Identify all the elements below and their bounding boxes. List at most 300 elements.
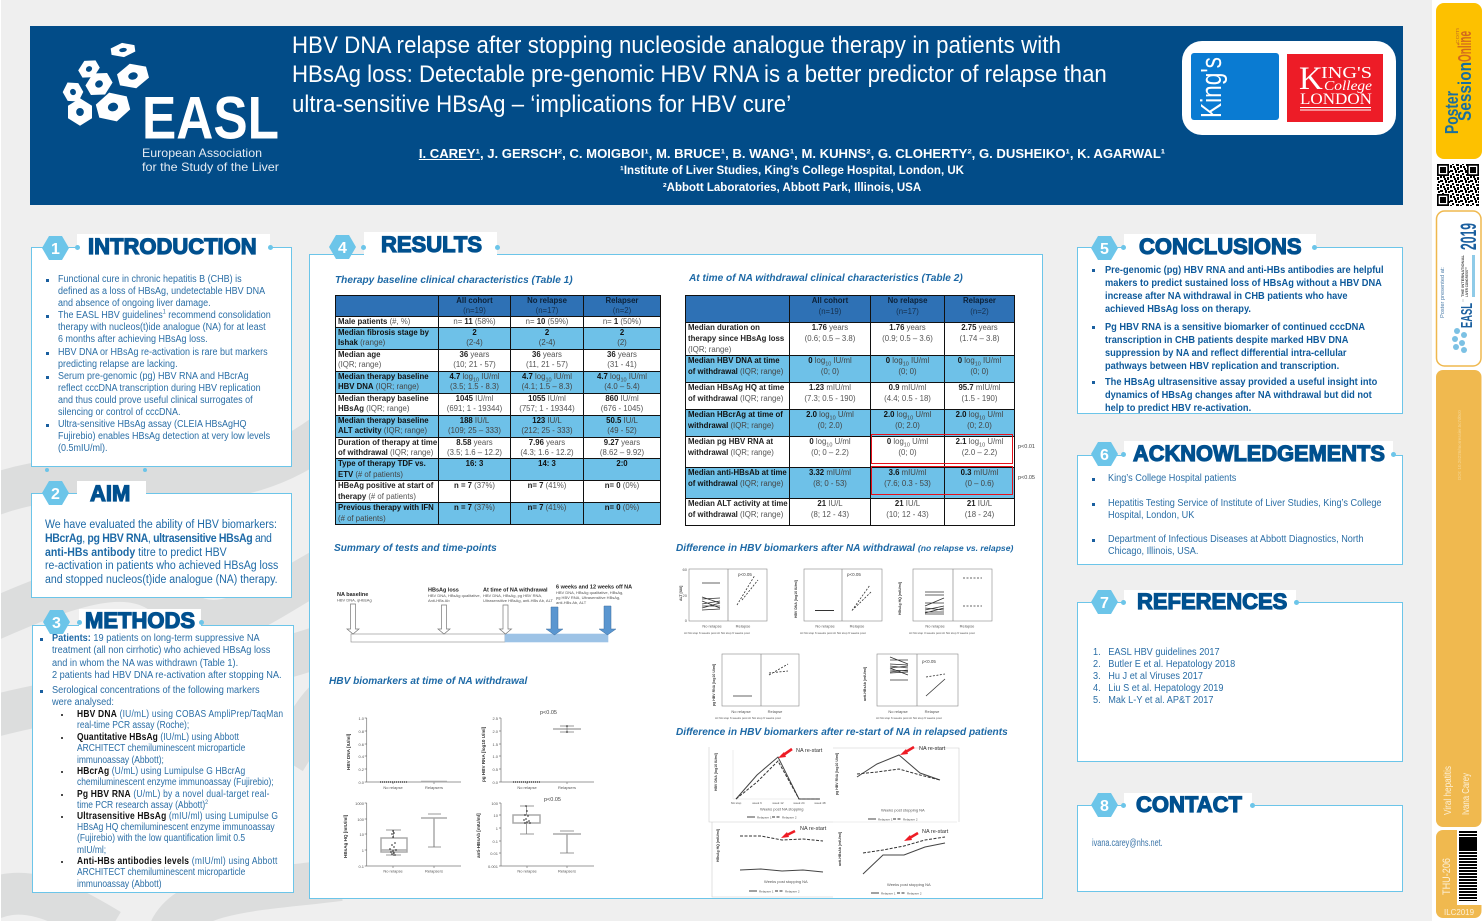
heading: references: REFERENCES — [1137, 589, 1287, 614]
chart: anti-HBs after restart: anti-HBsAb [mIU/ml] — [838, 832, 842, 866]
chart: anti-HBsAb box plot: 0.01 — [490, 851, 499, 856]
table 2: at withdrawal characteristics: Median HBsAg HQ at time — [688, 383, 784, 392]
chart: HBV DNA after withdrawal: Relapse — [850, 624, 865, 628]
table 2: at withdrawal characteristics: Median HBV DNA at time — [688, 356, 780, 365]
chart: pg HBV RNA box plot — [481, 710, 594, 790]
chart: HBsAg after withdrawal: No relapse — [925, 624, 945, 628]
table 2: at withdrawal characteristics: (0.9; 0.5 – 3.6) — [882, 334, 933, 343]
chart: HBsAg HQ box plot: 10 — [360, 832, 365, 837]
badge: topic and author: DOI: 10.26226/morressier.5c7d0c0 — [1457, 410, 1462, 480]
table 2: at withdrawal characteristics: 0 log10 IU/ml — [808, 356, 852, 368]
text: aim statement: re-activation in patients who achieved HBsAg loss — [45, 560, 278, 572]
logo: King's College Hospital and King's College London: K — [1299, 61, 1323, 97]
text: reference list — [1093, 647, 1235, 706]
icon: section number 7 — [1091, 590, 1118, 614]
timeline of tests: HBV DNA, qHBsAg — [337, 598, 372, 602]
table 1: therapy baseline characteristics: (n=17) — [536, 306, 558, 315]
chart: HBV DNA after restart — [709, 747, 833, 822]
chart: pg HBV RNA box plot: 1.5 — [492, 742, 499, 747]
text: acknowledgements bullets: King’s College Hospital patients — [1108, 473, 1236, 484]
text: patients and serological markers: Patients: 19 patients on long-term suppressive NA — [52, 633, 260, 644]
chart: ALT after withdrawal: ALT [IU/l] — [679, 586, 683, 601]
text: introduction bullets: reflect cccDNA transcription during HBV replication — [58, 382, 261, 394]
chart: HBV DNA after withdrawal: p<0.05 — [847, 572, 861, 577]
table 1: therapy baseline characteristics: 36 years — [460, 350, 489, 359]
text: introduction bullets: and absence of ongoing liver damage. — [58, 298, 211, 308]
table 2: at withdrawal characteristics: 0 log10 U/ml — [887, 437, 928, 449]
chart: anti-HBs after withdrawal: No relapse — [888, 709, 908, 714]
text: reference list: 3. Hu J et al Viruses 2017 — [1093, 671, 1203, 682]
table 1: therapy baseline characteristics: 14: 3 — [538, 459, 556, 468]
text: conclusions bullets: increase after NA withdrawal in CHB patients who have — [1105, 290, 1348, 302]
chart: anti-HBs after withdrawal: At NA stop 6 weeks post At NA stop 6 weeks post — [876, 716, 942, 720]
logo: EASL: for the Study of the Liver — [142, 160, 279, 174]
table 1: therapy baseline characteristics: All cohort — [456, 296, 493, 305]
chart: pg HBV RNA box plot: 1.0 — [492, 754, 499, 759]
table 2: at withdrawal characteristics: (0; 0) — [821, 367, 839, 376]
table 1: therapy baseline characteristics: HBV DNA (IQR; range) — [338, 382, 419, 391]
text: introduction bullets: Ultra-sensitive HBsAg assay (CLEIA HBsAgHQ — [58, 418, 247, 430]
chart: HBV DNA box plot: 0.2 — [358, 767, 365, 772]
table 2: at withdrawal characteristics: therapy since HBsAg loss — [688, 334, 784, 343]
table 2: at withdrawal characteristics: 3.32 mIU/ml — [809, 468, 851, 477]
icon: section number 6: 6 — [1100, 447, 1109, 464]
text: acknowledgements bullets — [1092, 473, 1382, 557]
text: conclusions bullets: achieved HBsAg loss on therapy. — [1105, 303, 1251, 315]
table 1: therapy baseline characteristics: 16: 3 — [466, 459, 483, 468]
table 1: therapy baseline characteristics: n= 1 (50%) — [603, 317, 641, 326]
badge: presented at EASL ILC 2019 — [1436, 211, 1481, 366]
table 1: therapy baseline characteristics: 9.27 years — [604, 438, 640, 447]
table 2: at withdrawal characteristics: Median HBcrAg at time of — [688, 410, 783, 419]
table 2: at withdrawal characteristics: 2.0 log10 U/ml — [956, 410, 1003, 422]
text: introduction bullets: 6 months after achieving HBsAg loss. — [58, 334, 208, 344]
badge: poster session online — [1436, 3, 1482, 159]
table 1: therapy baseline characteristics: (4.1; 1.5 – 8.3) — [522, 382, 572, 391]
table 1: therapy baseline characteristics: 123 IU/L — [532, 416, 562, 425]
table 1: therapy baseline characteristics: (109; 25 – 333) — [448, 426, 501, 435]
chart: anti-HBs after restart: Weeks post stopping NA — [887, 882, 931, 887]
panel: contact — [1077, 792, 1403, 892]
table 1: therapy baseline characteristics: (10; 21 - 57) — [453, 360, 496, 369]
table 1: therapy baseline characteristics: 36 years — [607, 350, 637, 359]
table 1: therapy baseline characteristics: Median therapy baseline — [338, 372, 429, 381]
badge: presented at EASL ILC 2019: LIVER CONGRESS™ — [1465, 267, 1469, 297]
table 1: therapy baseline characteristics: No relapse — [527, 296, 567, 305]
chart: HBV DNA after restart: week 12 — [772, 801, 784, 805]
chart: HBV DNA after restart: NA stop — [731, 801, 742, 805]
chart: HBsAg HQ box plot: 1000 — [355, 801, 365, 806]
table 1: therapy baseline characteristics: (757; 1 - 19344) — [519, 404, 575, 413]
table 1: therapy baseline characteristics: (n=19) — [463, 306, 486, 315]
text: aim statement — [45, 519, 278, 586]
table 2: at withdrawal characteristics — [685, 295, 1015, 526]
text: patients and serological markers: Serological concentrations of the following markers — [52, 685, 260, 696]
text: patients and serological markers: chemiluminescent enzyme immunoassay (Fujirebio); — [77, 777, 274, 788]
sidebar — [1432, 0, 1484, 921]
table 2: at withdrawal characteristics: (7.3; 0.5 - 190) — [804, 394, 856, 403]
table 2: at withdrawal characteristics: of withdrawal (IQR; range) — [688, 394, 783, 403]
table 1: therapy baseline characteristics: Median therapy baseline — [338, 416, 429, 425]
chart: anti-HBs after withdrawal: anti-HBsAb [mIU/ml] — [863, 667, 867, 701]
chart: pg HBV RNA box plot: No relapse — [517, 785, 537, 790]
table 2: at withdrawal characteristics: (0; 2.0) — [967, 421, 992, 430]
logo: King's College Hospital and King's College London: LONDON — [1300, 91, 1372, 108]
table 1: therapy baseline characteristics: n= 0 (0%) — [605, 481, 639, 490]
table 2: at withdrawal characteristics: (18 - 24) — [965, 510, 994, 519]
text: acknowledgements bullets: Department of Infectious Diseases at Abbott Diagnostics, North — [1108, 534, 1364, 545]
table 2: at withdrawal characteristics: (0; 0) — [970, 367, 989, 376]
text: introduction bullets: Fujirebio) enables HBsAg detection at very low levels — [58, 430, 270, 442]
text: patients and serological markers: real-time PCR assay (Roche); — [77, 720, 189, 731]
chart: ALT after withdrawal: 0 — [685, 618, 688, 623]
chart: pg RNA after withdrawal — [712, 654, 799, 720]
icon: section number 4 — [329, 235, 356, 259]
timeline of tests — [337, 584, 632, 642]
table 1: therapy baseline characteristics: HBsAg (IQR; range) — [338, 404, 410, 413]
chart: HBV DNA box plot: 0.8 — [358, 729, 365, 734]
table 2: at withdrawal characteristics: (0; 2.0) — [818, 421, 842, 430]
table 2: at withdrawal characteristics: (8; 12 - 43) — [811, 510, 849, 519]
text: reference list: 4. Liu S et al. Hepatology 2019 — [1093, 683, 1224, 694]
text: conclusions bullets: dynamics of HBsAg changes after NA withdrawal but did not — [1105, 389, 1372, 401]
table 1: therapy baseline characteristics: Median fibrosis stage by — [338, 328, 429, 337]
table 1: therapy baseline characteristics: 2:0 — [616, 459, 628, 468]
logo: King's College Hospital and King's College London: King's — [1196, 57, 1228, 118]
table 1: therapy baseline characteristics: 860 IU/ml — [605, 394, 639, 403]
icon: section number 1 — [42, 236, 69, 260]
chart: pg HBV RNA box plot: 0.0 — [492, 780, 499, 785]
badge: poster session online: Poster — [1442, 91, 1462, 134]
icon: section number 8 — [1091, 793, 1118, 817]
chart: pg HBV RNA box plot: 2.5 — [492, 716, 499, 721]
icon: section number 8: 8 — [1100, 798, 1109, 815]
table 2: at withdrawal characteristics: 1.76 years — [889, 323, 926, 332]
panel: references — [1077, 589, 1403, 762]
text: patients and serological markers: time PCR research assay (Abbott)2 — [77, 800, 208, 811]
badge: topic and author — [1436, 370, 1482, 827]
chart: HBV DNA after restart: HBV DNA [log10 IU/ml] — [714, 753, 718, 791]
table 1: therapy baseline characteristics: of withdrawal (IQR; range) — [338, 448, 433, 457]
badge: poster code and barcode: THU-206 — [1441, 858, 1453, 895]
heading: contact: CONTACT — [1136, 792, 1242, 817]
chart: HBV DNA box plot: HBV DNA [IU/ml] — [346, 733, 351, 770]
text: conclusions bullets: Pre-genomic (pg) HBV RNA and anti-HBs antibodies are helpful — [1105, 264, 1384, 276]
timeline of tests: Anti-HBs Ab — [428, 598, 450, 603]
badge: poster session online: .com — [1455, 27, 1461, 46]
chart: ALT after withdrawal: p<0.05 — [738, 572, 752, 577]
table 2: at withdrawal characteristics: 2.0 log10 U/ml — [884, 410, 931, 422]
chart: anti-HBs after restart: Relapser 1 — [881, 892, 896, 896]
table 2: at withdrawal characteristics: (8; 0 - 53) — [813, 479, 847, 488]
chart: HBsAg HQ box plot: Relapsers — [425, 868, 443, 874]
table 2: at withdrawal characteristics: Median pg HBV RNA at — [688, 437, 773, 446]
chart: pg HBV RNA box plot: 2.0 — [492, 729, 499, 734]
heading: results: RESULTS — [381, 232, 482, 257]
table 1: therapy baseline characteristics: (n=2) — [613, 306, 631, 315]
table 1: therapy baseline characteristics: ALT activity (IQR; range) — [338, 426, 427, 435]
chart: anti-HBsAb box plot: p<0.05 — [544, 797, 561, 803]
table 1: therapy baseline characteristics: HBeAg positive at start of — [338, 481, 433, 490]
table 2: at withdrawal characteristics: (0 – 0.6) — [965, 479, 994, 488]
chart: pg RNA after restart: Relapser 2 — [903, 818, 918, 822]
chart: pg RNA after withdrawal: At NA stop 6 weeks post At NA stop 6 weeks post — [715, 716, 781, 720]
text: patients and serological markers: Pg HBV RNA (U/mL) by a novel dual-target real- — [77, 789, 270, 800]
chart: HBsAg after restart: Weeks post stopping NA — [764, 879, 808, 884]
text: reference list: 5. Mak L-Y et al. AP&T 2017 — [1093, 695, 1213, 706]
table 1: therapy baseline characteristics: (676 - 1045) — [601, 404, 643, 413]
text: aim statement: and stopped nucleos(t)ide analogue (NA) therapy. — [45, 574, 278, 586]
icon: section number 2: 2 — [51, 486, 60, 503]
panel: conclusions — [1077, 234, 1403, 414]
chart: pg RNA after restart: Weeks post stopping NA — [881, 808, 925, 812]
chart: anti-HBs after restart — [833, 822, 957, 896]
icon: section number 3: 3 — [52, 615, 61, 632]
chart: HBV DNA box plot: 0.0 — [358, 780, 365, 785]
heading: methods: METHODS — [85, 608, 195, 633]
chart: HBsAg HQ box plot: No relapse — [383, 868, 403, 874]
logo: King's College Hospital and King's College London — [1182, 41, 1396, 135]
text: introduction bullets: and thus could prove useful clinical surrogates of — [58, 394, 253, 406]
chart: HBV DNA after restart: week 24 — [793, 801, 805, 805]
timeline of tests: Ultrasensitive HBsAg, anti-HBs Ab, ALT — [483, 598, 554, 603]
chart: HBV DNA box plot: 1.0 — [358, 716, 365, 721]
table 1: therapy baseline characteristics: (3.5; 1.6 – 12.2) — [447, 448, 502, 457]
table 2: at withdrawal characteristics: (1.74 – 3.8) — [960, 334, 999, 343]
table 1: therapy baseline characteristics: n = 7 (37%) — [454, 481, 495, 490]
table 1: therapy baseline characteristics: (2-4) — [539, 338, 555, 347]
chart: pg HBV RNA box plot: 0.5 — [492, 767, 499, 772]
table 2: at withdrawal characteristics: (7.6; 0.3 - 53) — [884, 479, 931, 488]
text: aim statement: We have evaluated the ability of HBV biomarkers: — [45, 519, 277, 531]
text: conclusions bullets: Pg HBV RNA is a sensitive biomarker of continued cccDNA — [1105, 321, 1365, 333]
table 2: at withdrawal characteristics: (0; 2.0) — [895, 421, 920, 430]
table 1: therapy baseline characteristics: 1045 IU/ml — [456, 394, 493, 403]
text: conclusions bullets: transcription in CHB patients despite marked HBV DNA — [1105, 334, 1348, 346]
table 2: at withdrawal characteristics: of withdrawal (IQR; range) — [688, 367, 783, 376]
text: acknowledgements bullets: Chicago, Illinois, USA. — [1108, 546, 1198, 557]
table 2: at withdrawal characteristics: 1.23 mIU/ml — [809, 383, 851, 392]
table 2: at withdrawal characteristics: 21 IU/L — [895, 499, 920, 508]
chart: anti-HBsAb box plot: No relapse — [517, 868, 537, 874]
text: introduction bullets: silencing or control of cccDNA. — [58, 406, 181, 418]
table 1: therapy baseline characteristics: 4.7 log10 IU/ml — [597, 372, 647, 384]
table 1: therapy baseline characteristics: n= 10 (59%) — [526, 317, 568, 326]
badge: poster session online: Session — [1455, 62, 1475, 121]
chart: HBV DNA after withdrawal — [794, 569, 882, 635]
table 1: therapy baseline characteristics: Ishak (range) — [338, 338, 385, 347]
chart: HBsAg after restart — [712, 822, 833, 897]
text: aim statement: anti-HBs antibody titre to predict HBV — [45, 547, 227, 559]
table 1: therapy baseline characteristics: 4.7 log10 IU/ml — [450, 372, 499, 384]
table 2: at withdrawal characteristics: (4.4; 0.5 - 18) — [884, 394, 931, 403]
table 2: at withdrawal characteristics: 2.1 log10 U/ml — [956, 437, 1003, 449]
chart: HBV DNA after restart: NA re-start — [796, 748, 823, 754]
chart: HBV DNA after restart: week 48 — [814, 801, 826, 805]
text: patients and serological markers: Ultrasensitive HBsAg (mIU/ml) using Lumipulse G — [77, 811, 278, 822]
header banner — [30, 26, 1403, 205]
timeline of tests: 6 weeks and 12 weeks off NA — [556, 584, 632, 590]
chart: anti-HBsAb box plot: anti-HBsAb [mIU/ml] — [476, 813, 481, 858]
table 1: therapy baseline characteristics: 1055 IU/ml — [528, 394, 566, 403]
chart: HBV DNA box plot: No relapse — [383, 785, 403, 790]
icon: section number 6 — [1091, 442, 1118, 466]
title — [292, 32, 1107, 118]
table 2: at withdrawal characteristics: (n=2) — [970, 307, 989, 316]
text: patients and serological markers: Quantitative HBsAg (IU/mL) using Abbott — [77, 732, 239, 743]
timeline of tests: At time of NA withdrawal — [483, 588, 548, 594]
table 2: at withdrawal characteristics: Median duration on — [688, 323, 760, 332]
table 2: at withdrawal characteristics: 21 IU/L — [817, 499, 843, 508]
table 2: at withdrawal characteristics: 95.7 mIU/ml — [958, 383, 1001, 392]
table 2: at withdrawal characteristics: of withdrawal (IQR; range) — [688, 510, 783, 519]
text: introduction bullets: The EASL HBV guidelines1 recommend consolidation — [58, 309, 271, 320]
text: introduction bullets: defined as a loss of HBsAg, undetectable HBV DNA — [58, 286, 265, 296]
logo: EASL: European Association — [142, 146, 262, 160]
table 1: therapy baseline characteristics: (4.0 – 5.4) — [604, 382, 640, 391]
chart: anti-HBsAb box plot: 10 — [494, 813, 499, 818]
icon: section number 5 — [1091, 236, 1118, 260]
table 1: therapy baseline characteristics: n= 11 (58%) — [453, 317, 496, 326]
heading: summary: Summary of tests and time-points — [334, 543, 497, 554]
text: reference list: 2. Butler E et al. Hepatology 2018 — [1093, 659, 1235, 670]
table 2: at withdrawal characteristics: (0; 0) — [898, 367, 917, 376]
chart: HBV DNA after withdrawal: At NA stop 6 weeks post At NA stop 6 weeks post — [800, 631, 866, 635]
table 1: therapy baseline characteristics: 4.7 log10 IU/ml — [522, 372, 572, 384]
table 1: therapy baseline characteristics: Relapser — [606, 296, 638, 305]
table 1: therapy baseline characteristics: (11, 21 - 57) — [526, 360, 568, 369]
text: introduction bullets: therapy with nucleos(t)ide analogue (NA) for at least — [58, 322, 266, 332]
table 2: at withdrawal characteristics: 1.76 years — [812, 323, 848, 332]
text: conclusions bullets: The HBsAg ultrasensitive assay provided a useful insight into — [1105, 376, 1377, 388]
table 2: at withdrawal characteristics: Median anti-HBsAb at time — [688, 468, 787, 477]
chart: pg HBV RNA box plot: pg HBV RNA [log10 U/ml] — [481, 726, 486, 782]
table 2: at withdrawal characteristics: (IQR; range) — [688, 345, 731, 354]
table 1: therapy baseline characteristics: n= 0 (0%) — [605, 503, 639, 512]
table 2: at withdrawal characteristics: (0.6; 0.5 – 3.8) — [805, 334, 855, 343]
logo: King's College Hospital and King's College London: ING'S — [1321, 63, 1372, 82]
text: patients and serological markers: were analysed: — [52, 697, 114, 708]
authors and affiliations: I. CAREY¹, J. GERSCH², C. MOIGBOI¹, M. BRUCE¹, B. WANG¹, M. KUHNS², G. CLOHERTY², G. DUSHEIKO¹, K. AGARWAL¹ — [419, 146, 1165, 161]
text: patients and serological markers: immunoassay (Abbott); — [77, 755, 164, 766]
label: p values: p<0.01 p<0.05 — [1018, 444, 1035, 481]
chart: ALT after withdrawal: 60 — [683, 567, 688, 572]
chart: anti-HBs after restart: Relapser 2 — [907, 892, 922, 896]
badge: topic and author: Viral hepatitis — [1442, 766, 1454, 815]
text: patients and serological markers: treatment (all non cirrhotic) who achieved HBsAg loss — [52, 645, 270, 656]
text: conclusions bullets: suppression by NA and reflect differential intra-cellular — [1105, 347, 1347, 359]
table 2: at withdrawal characteristics: No relapse — [888, 296, 927, 305]
icon: section number 7: 7 — [1100, 595, 1109, 612]
badge: poster session online: Online — [1455, 31, 1475, 62]
table 1: therapy baseline characteristics: 50.5 IU/L — [606, 416, 638, 425]
table 1: therapy baseline characteristics: Type of therapy TDF vs. — [338, 459, 426, 468]
table 1: therapy baseline characteristics: 36 years — [532, 350, 562, 359]
icon: section number 3 — [43, 610, 70, 634]
timeline of tests: HBsAg loss — [428, 588, 459, 594]
table 1: therapy baseline characteristics: 2 — [620, 328, 624, 337]
chart: anti-HBsAb box plot — [476, 797, 594, 874]
title: ultra-sensitive HBsAg – ‘implications for HBV cure’ — [292, 91, 791, 118]
table 2: at withdrawal characteristics: (1.5 - 190) — [962, 394, 997, 403]
table 2: at withdrawal characteristics: Relapser — [963, 296, 996, 305]
logo: EASL — [60, 41, 279, 174]
text: patients and serological markers: ARCHITECT chemiluminescent microparticle — [77, 867, 245, 878]
timeline of tests: NA baseline — [337, 592, 368, 598]
table 1: therapy baseline characteristics: (212; 25 - 333) — [521, 426, 573, 435]
icon: section number 1: 1 — [51, 241, 60, 258]
table 1: therapy baseline characteristics: 2 — [472, 328, 477, 337]
text: patients and serological markers: HBV DNA (IU/mL) using COBAS AmpliPrep/TaqMan — [77, 709, 283, 720]
chart: HBV DNA after restart: Relapser 2 — [782, 816, 797, 820]
timeline of tests: anti-HBs Ab, ALT — [556, 600, 587, 605]
table 1: therapy baseline characteristics: 188 IU/L — [460, 416, 489, 425]
text: patients and serological markers — [40, 633, 283, 890]
table 2: at withdrawal characteristics: withdrawal (IQR; range) — [688, 421, 774, 430]
table 2: at withdrawal characteristics: (2.0 – 2.2) — [962, 448, 997, 457]
table 1: therapy baseline characteristics: (3.5; 1.5 - 8.3) — [450, 382, 499, 391]
chart: HBV DNA after restart: week 6 — [752, 801, 762, 805]
logo: EASL: EASL — [142, 84, 279, 152]
chart: HBsAg after restart: NA re-start — [800, 826, 827, 832]
chart: anti-HBsAb box plot: 0.001 — [488, 864, 499, 869]
text: conclusions bullets: makers to predict sustained loss of HBsAg without a HBV DNA — [1105, 277, 1382, 289]
table 2: at withdrawal characteristics: 0 log10 IU/ml — [958, 356, 1001, 368]
icon: section number 5: 5 — [1100, 241, 1109, 258]
table 1: therapy baseline characteristics: (IQR; range) — [338, 360, 381, 369]
table 2: at withdrawal characteristics: withdrawal (IQR; range) — [688, 448, 774, 457]
heading: table 1: Therapy baseline clinical characteristics (Table 1) — [335, 275, 573, 286]
heading: biomarkers at withdrawal: HBV biomarkers at time of NA withdrawal — [329, 676, 527, 686]
chart: HBV DNA after withdrawal: HBV DNA [log10 IU/ml] — [794, 580, 798, 618]
table 2: at withdrawal characteristics: (10; 12 - 43) — [886, 510, 929, 519]
timeline of tests: HBV DNA, HBsAg qualitative, — [428, 593, 481, 598]
text: patients and serological markers: and in whom the NA was withdrawn (Table 1). — [52, 658, 238, 669]
chart: pg RNA after restart — [833, 746, 959, 822]
badge: poster code and barcode: ILC2019 — [1444, 907, 1474, 917]
chart: ALT after withdrawal: At NA stop 6 weeks post At NA stop 6 weeks post — [684, 631, 750, 635]
chart: ALT after withdrawal — [679, 567, 767, 635]
text: conclusions bullets — [1092, 264, 1384, 414]
chart: ALT after withdrawal: No relapse — [702, 624, 722, 628]
text: contact email: ivana.carey@nhs.net. — [1092, 838, 1163, 849]
table 2: at withdrawal characteristics: 0.9 mIU/ml — [889, 383, 926, 392]
table 2: at withdrawal characteristics: (0; 0 – 2.2) — [811, 448, 849, 457]
chart: pg RNA after withdrawal: pg HBV RNA [log10 U/ml] — [712, 664, 716, 706]
table 2: at withdrawal characteristics: 0 log10 U/ml — [809, 437, 851, 449]
table 1: therapy baseline characteristics: (# of patients) — [338, 514, 386, 523]
text: acknowledgements bullets: Hospital, London, UK — [1108, 510, 1194, 521]
table 1: therapy baseline characteristics: 7.96 years — [529, 438, 565, 447]
chart: HBsAg after withdrawal: Relapse — [960, 624, 975, 628]
text: patients and serological markers: immunoassay (Abbott) — [77, 879, 162, 890]
panel: aim — [31, 468, 292, 598]
chart: HBsAg after restart: HBsAg HQ [mIU/ml] — [716, 829, 720, 862]
heading: biomarkers after withdrawal: Difference in HBV biomarkers after NA withdrawal (no relapse vs. relapse) — [676, 543, 1013, 554]
table 1: therapy baseline characteristics: ETV (# of patients) — [338, 470, 403, 479]
table 2: at withdrawal characteristics: 0 log10 IU/ml — [886, 356, 929, 368]
table 1: therapy baseline characteristics: 2 — [545, 328, 549, 337]
chart: pg RNA after restart: pg HBV RNA [log10 U/ml] — [835, 753, 839, 795]
table 1: therapy baseline characteristics: (2) — [617, 338, 627, 347]
panel: introduction — [31, 234, 292, 467]
chart: pg RNA after withdrawal: Relapse — [768, 709, 783, 714]
table 1: therapy baseline characteristics: Previous therapy with IFN — [338, 503, 434, 512]
heading: aim: AIM — [90, 481, 130, 506]
timeline of tests: HBV DNA, HBsAg qualitative, HBsAg, — [556, 590, 623, 595]
chart: HBV DNA box plot: 0.4 — [358, 754, 365, 759]
table 2: at withdrawal characteristics: 2.75 years — [961, 323, 998, 332]
